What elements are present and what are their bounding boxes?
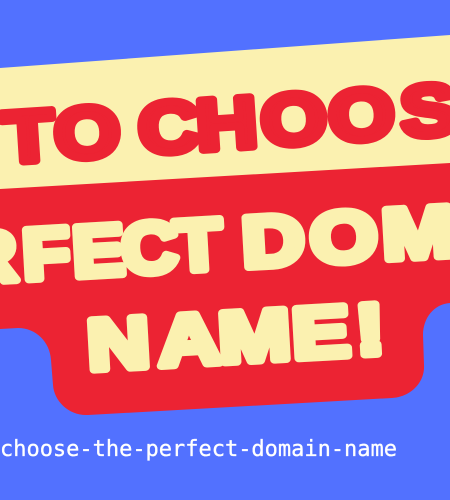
heading: line two: DOM	[240, 190, 450, 283]
heading: line one: TO CHOOS	[0, 68, 450, 178]
heading: line two	[0, 190, 450, 298]
panel: red title banner	[0, 163, 450, 415]
heading: line three: NAME!	[85, 288, 387, 385]
panel: cream title banner	[0, 35, 450, 195]
url text: choose-the-perfect-domain-name	[0, 437, 397, 462]
